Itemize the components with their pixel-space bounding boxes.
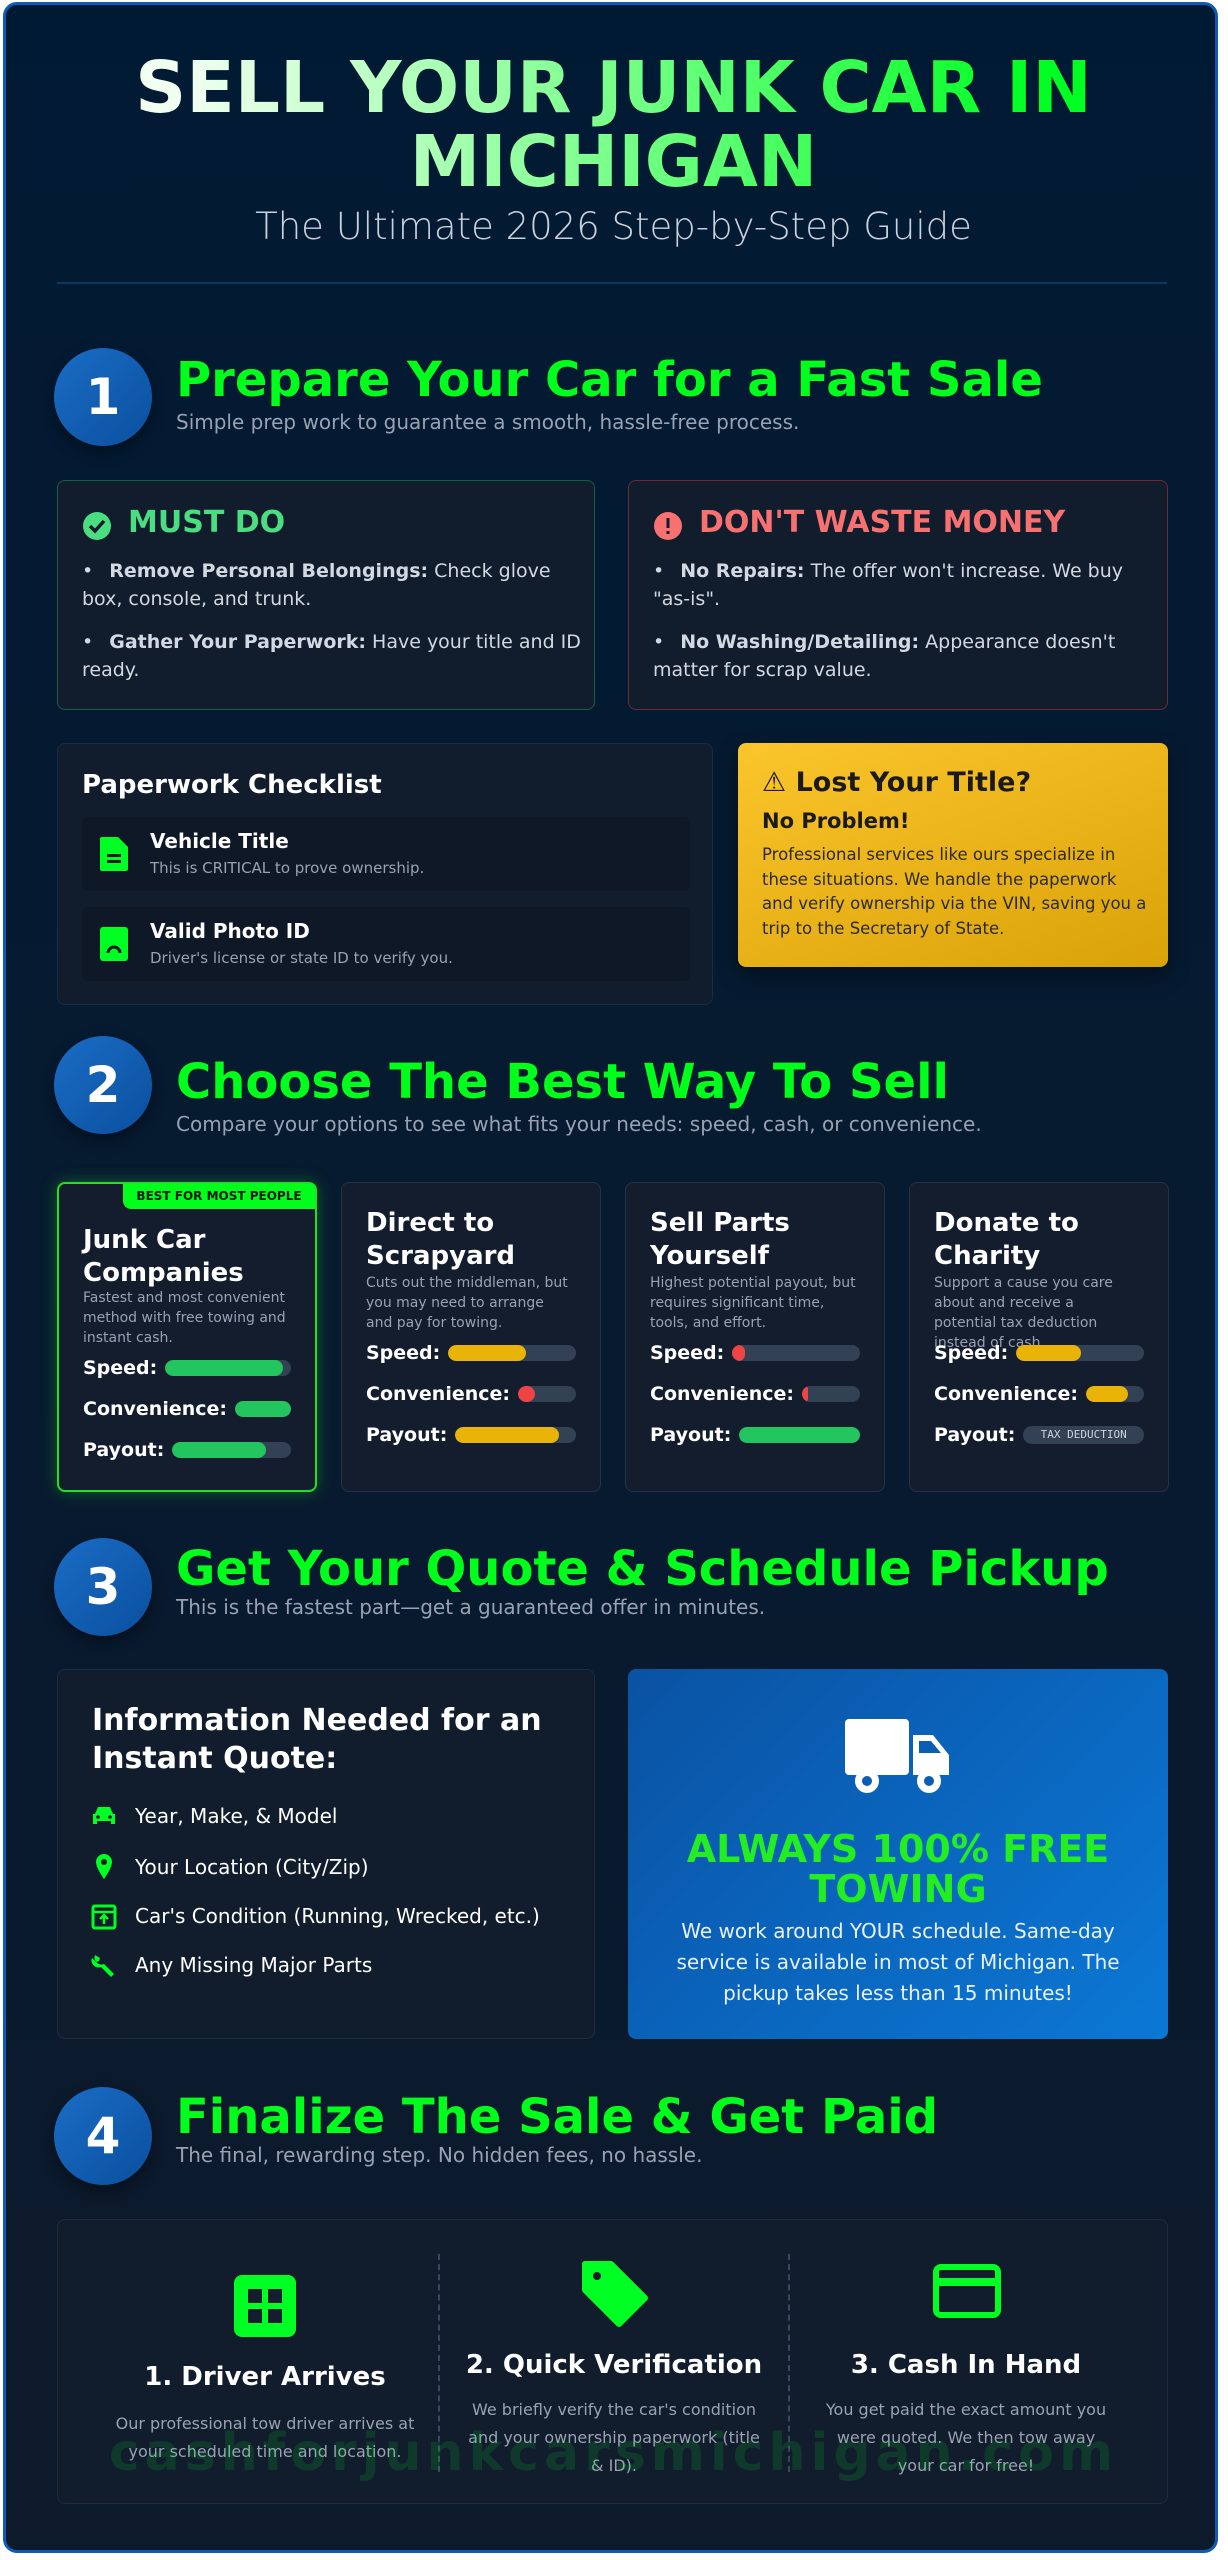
option card: sell parts: Speed: (650, 1342, 724, 1364)
item: photo id: Valid Photo ID (150, 919, 310, 943)
option card: scrapyard: Scrapyard (366, 1241, 515, 1271)
option card: donate: Charity (934, 1241, 1040, 1271)
step: verification (466, 2261, 762, 2475)
step 4 heading: Finalize The Sale & Get Paid (176, 2089, 938, 2145)
panel: paperwork checklist (57, 743, 713, 1005)
panel: info needed: Instant Quote: (92, 1741, 337, 1776)
step 3 heading: This is the fastest part—get a guaranteed offer in minutes. (176, 1595, 765, 1619)
option card: scrapyard: Convenience: (366, 1383, 510, 1405)
option card: donate: Speed: (934, 1342, 1008, 1364)
icon: check (83, 512, 111, 540)
heading: must do: MUST DO (128, 505, 285, 540)
option card: junk car companies: Fastest and most convenient method with free towing and instant cash. (83, 1290, 286, 1346)
option card: donate: Donate to (934, 1208, 1079, 1238)
icon list: Year, Make, & Model (135, 1804, 337, 1828)
step: driver arrives (116, 2275, 414, 2461)
panel: final steps: You get paid the exact amount you were quoted. We then tow away your car for free! (826, 2400, 1106, 2475)
panel: free towing: TOWING (809, 1867, 987, 1911)
icon list: Your Location (City/Zip) (135, 1855, 368, 1879)
list: don't waste: No Repairs: The offer won't increase. We buy "as-is". (653, 560, 1123, 610)
title: SELL YOUR JUNK CAR IN (135, 46, 1092, 129)
step 4 number (54, 2087, 152, 2185)
step 1 heading: Prepare Your Car for a Fast Sale (176, 352, 1043, 408)
option card: junk car companies: Junk Car (83, 1225, 205, 1255)
step 1 number (54, 348, 152, 446)
callout: lost your title: No Problem! (762, 809, 909, 833)
step 3 number: 3 (86, 1558, 120, 1616)
list: must do: Gather Your Paperwork: Have your title and ID ready. (82, 631, 581, 681)
option card: scrapyard: Cuts out the middleman, but you may need to arrange and pay for towing. (366, 1275, 568, 1331)
option card: donate (909, 1182, 1169, 1492)
item: vehicle title: Vehicle Title (150, 829, 289, 853)
icon list: Any Missing Major Parts (135, 1953, 372, 1977)
step 2 number: 2 (86, 1056, 120, 1114)
option card: scrapyard: Payout: (366, 1424, 447, 1446)
item: vehicle title: This is CRITICAL to prove ownership. (150, 859, 424, 877)
icon list (92, 1804, 540, 1977)
list: must do: Remove Personal Belongings: Check glove box, console, and trunk. (82, 560, 551, 610)
option card: scrapyard: Speed: (366, 1342, 440, 1364)
icon: alert (654, 512, 682, 540)
option card: donate: TAX DEDUCTION (1041, 1428, 1127, 1441)
panel: final steps: 1. Driver Arrives (144, 2362, 386, 2392)
watermark: cashforjunkcarsmichigan.com (109, 2423, 1118, 2483)
icon list: Car's Condition (Running, Wrecked, etc.) (135, 1904, 540, 1928)
item: vehicle title (82, 817, 690, 891)
list: must do (82, 560, 581, 681)
heading: paperwork: Paperwork Checklist (82, 770, 382, 800)
option card: sell parts: Highest potential payout, but requires significant time, tools, and effort. (650, 1275, 856, 1331)
option card: junk car companies: Companies (83, 1258, 244, 1288)
callout: lost your title: Professional services like ours specialize in these situations. We handle the paperwork and verify ownership via the VIN, saving you a trip to the Secretary of State. (762, 845, 1146, 938)
option card: scrapyard: Direct to (366, 1208, 494, 1238)
panel: free towing (628, 1669, 1168, 2039)
option card: junk car companies: Payout: (83, 1439, 164, 1461)
panel: final steps: Our professional tow driver arrives at your scheduled time and location. (116, 2414, 414, 2461)
option card: junk car companies: Speed: (83, 1357, 157, 1379)
option card: donate: Convenience: (934, 1383, 1078, 1405)
panel: final steps: We briefly verify the car's condition and your ownership paperwork (title & ID). (468, 2400, 760, 2475)
step 3 number (54, 1538, 152, 1636)
option card: sell parts: Yourself (650, 1241, 769, 1271)
option card: sell parts: Convenience: (650, 1383, 794, 1405)
step 2 number (54, 1036, 152, 1134)
option card: sell parts (625, 1182, 885, 1492)
option card: donate: Payout: (934, 1424, 1015, 1446)
list: don't waste (653, 560, 1123, 681)
callout: lost your title: ⚠ Lost Your Title? (762, 767, 1031, 798)
option card: sell parts: Sell Parts (650, 1208, 790, 1238)
item: photo id (82, 907, 690, 981)
title (6, 51, 1221, 199)
callout: lost your title (738, 743, 1168, 967)
badge (123, 1184, 315, 1209)
panel: free towing: We work around YOUR schedule. Same-day service is available in most of Michigan. The pickup takes less than 15 minutes! (676, 1919, 1120, 2005)
list: don't waste: No Washing/Detailing: Appearance doesn't matter for scrap value. (653, 631, 1115, 681)
step 1 heading (176, 352, 1043, 434)
panel: don't waste money (628, 480, 1168, 710)
step 4 number: 4 (86, 2107, 120, 2165)
panel: free towing: ALWAYS 100% FREE (687, 1827, 1109, 1871)
step 2 heading: Choose The Best Way To Sell (176, 1054, 949, 1110)
step 1 heading: Simple prep work to guarantee a smooth, hassle-free process. (176, 410, 799, 434)
panel: final steps: 3. Cash In Hand (851, 2350, 1081, 2380)
step 3 heading: Get Your Quote & Schedule Pickup (176, 1541, 1109, 1597)
option card: sell parts: Payout: (650, 1424, 731, 1446)
option card: junk car companies (57, 1182, 317, 1492)
step 2 heading (176, 1054, 982, 1136)
panel: final steps: 2. Quick Verification (466, 2350, 762, 2380)
heading: don't waste: DON'T WASTE MONEY (699, 505, 1065, 540)
panel: final steps (57, 2219, 1168, 2504)
title: MICHIGAN (410, 120, 817, 203)
step 2 heading: Compare your options to see what fits your needs: speed, cash, or convenience. (176, 1112, 982, 1136)
badge: BEST FOR MOST PEOPLE (136, 1189, 302, 1203)
option card: scrapyard (341, 1182, 601, 1492)
step 1 number: 1 (86, 368, 120, 426)
panel: info needed: Information Needed for an (92, 1703, 542, 1738)
item: photo id: Driver's license or state ID to verify you. (150, 949, 453, 967)
subtitle: The Ultimate 2026 Step-by-Step Guide (255, 205, 972, 248)
panel: info needed (57, 1669, 595, 2039)
option card: donate: Support a cause you care about and receive a potential tax deduction instead of cash. (934, 1275, 1113, 1351)
icon: truck (845, 1719, 949, 1793)
step: cash in hand (826, 2264, 1106, 2475)
option card: junk car companies: Convenience: (83, 1398, 227, 1420)
panel: must do (57, 480, 595, 710)
step 4 heading: The final, rewarding step. No hidden fees, no hassle. (176, 2143, 702, 2167)
